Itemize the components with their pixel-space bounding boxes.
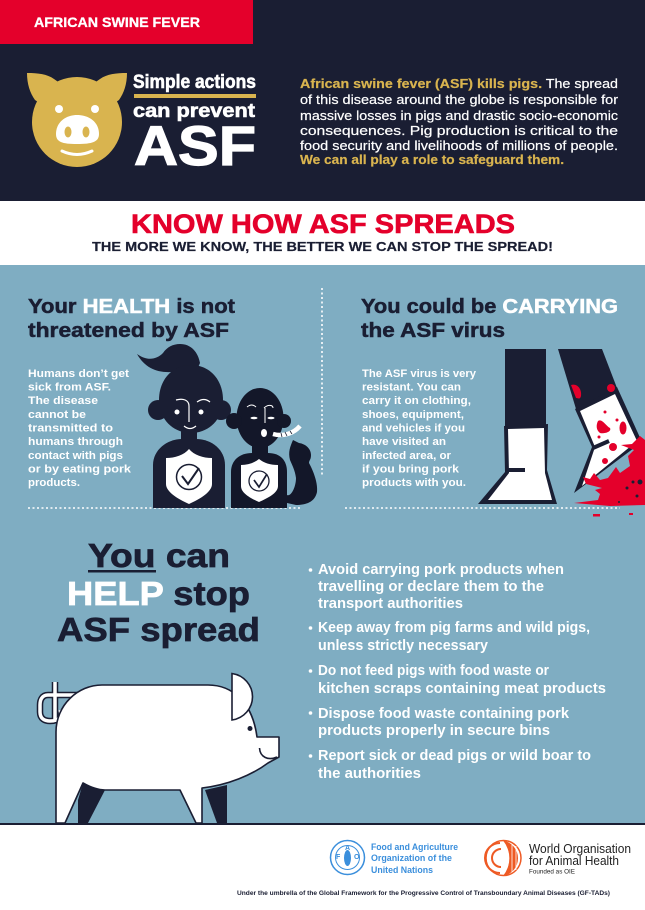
heading: know how ASF spreads: THE MORE WE KNOW, THE BETTER WE CAN STOP THE SPREAD!	[92, 239, 553, 254]
heading: you could be carrying	[361, 296, 618, 342]
text: humans: cannot be	[28, 409, 86, 421]
pig tail	[40, 682, 85, 722]
intro paragraph: massive losses in pigs and drastic socio-economic	[300, 109, 618, 123]
intro paragraph	[300, 77, 618, 167]
logo title: simple actions can prevent ASF	[133, 72, 256, 177]
heading: you could be carrying: the ASF virus	[361, 320, 505, 342]
illustration: white pig	[40, 674, 279, 823]
text: virus resistant: shoes, equipment,	[362, 409, 464, 421]
text: virus resistant: have visited an	[362, 436, 446, 448]
list: actions	[309, 562, 606, 782]
action 1	[309, 562, 564, 612]
text: humans: Humans don’t get	[28, 368, 129, 380]
red tag: African swine fever	[0, 0, 253, 44]
action 1: transport authorities	[318, 596, 463, 612]
pig body	[56, 685, 279, 823]
heading: you can help stop ASF spread: HELP stop	[67, 575, 250, 612]
FAO emblem: A	[345, 845, 350, 852]
pig back legs	[78, 783, 227, 823]
text: humans: or by eating pork	[28, 464, 132, 476]
heading: you can help stop ASF spread: You can	[88, 537, 230, 574]
WOAH emblem	[485, 840, 521, 876]
text: virus resistant: products with you.	[362, 477, 466, 489]
heading: know how ASF spreads	[92, 209, 553, 254]
FAO emblem: O	[354, 854, 360, 861]
text: virus resistant: infected area, or	[362, 450, 452, 462]
action 1: travelling or declare them to the	[318, 579, 544, 595]
logo: World Organisation for Animal Health	[485, 840, 631, 876]
text: virus resistant: and vehicles if you	[362, 422, 465, 434]
text: virus resistant: The ASF virus is very	[362, 368, 477, 380]
panel: header	[0, 0, 645, 201]
pig eye	[248, 726, 252, 731]
intro paragraph: food security and livelihoods of millions of people.	[300, 139, 618, 153]
action 4: products properly in secure bins	[318, 723, 550, 739]
intro paragraph: African swine fever (ASF) kills pigs. The spread	[300, 77, 618, 91]
WOAH name	[529, 842, 631, 876]
heading: your health is not threatened: Your HEALTH is not	[28, 296, 235, 318]
text: humans	[28, 368, 132, 489]
heading: know how ASF spreads: KNOW HOW ASF SPREADS	[131, 209, 515, 239]
text: humans: products.	[28, 477, 80, 489]
heading: your health is not threatened: threatened by ASF	[28, 320, 229, 342]
action 4: Dispose food waste containing pork	[318, 706, 570, 722]
text: virus resistant: if you bring pork	[362, 464, 460, 476]
heading: you could be carrying: You could be CARRYING	[361, 296, 618, 318]
text: humans: The disease	[28, 395, 98, 407]
logo title: simple actions can prevent ASF: Simple actions	[133, 72, 256, 93]
intro paragraph: consequences. Pig production is critical to the	[300, 124, 618, 138]
action 2: Keep away from pig farms and wild pigs,	[318, 620, 590, 636]
FAO emblem	[330, 840, 364, 874]
illustration: clean left leg and boot	[478, 349, 557, 504]
FAO name: Organization of the	[371, 853, 452, 864]
heading: your health is not threatened	[28, 296, 235, 342]
text: humans: transmitted to	[28, 422, 113, 434]
action 2	[309, 620, 590, 654]
action 3: Do not feed pigs with food waste or	[318, 663, 549, 679]
text: humans: humans through	[28, 436, 123, 448]
action 3	[309, 663, 606, 697]
pig ear	[232, 674, 253, 720]
FAO name	[371, 842, 458, 876]
panel: blue background	[0, 265, 645, 824]
action 1: Avoid carrying pork products when	[318, 562, 564, 578]
heading: you can help stop ASF spread: ASF spread	[57, 611, 260, 648]
illustration: contaminated right leg and boot	[558, 349, 645, 516]
text: virus resistant: resistant. You can	[362, 382, 461, 394]
WOAH name: Founded as OIE	[529, 868, 576, 876]
FAO emblem: F	[336, 854, 341, 861]
illustration: woman with shield	[137, 344, 231, 508]
red tag: African swine fever: AFRICAN SWINE FEVER	[34, 14, 200, 30]
logo: FAO	[330, 840, 458, 876]
action 5: Report sick or dead pigs or wild boar to	[318, 748, 591, 764]
text: virus resistant: carry it on clothing,	[362, 395, 471, 407]
action 3: kitchen scraps containing meat products	[318, 681, 606, 697]
text: humans: contact with pigs	[28, 450, 123, 462]
logo title: simple actions can prevent ASF: can prevent	[133, 101, 256, 122]
action 5	[309, 748, 591, 782]
logo title: simple actions can prevent ASF: ASF	[134, 114, 256, 177]
intro paragraph: We can all play a role to safeguard them.	[300, 153, 564, 167]
WOAH name: for Animal Health	[529, 854, 619, 868]
icon: pig face	[27, 73, 127, 167]
text: humans: sick from ASF.	[28, 382, 111, 394]
pig mouth	[260, 748, 277, 759]
action 2: unless strictly necessary	[318, 638, 488, 654]
action 4	[309, 706, 570, 739]
text: virus resistant	[362, 368, 477, 489]
WOAH name: World Organisation	[529, 842, 631, 856]
heading: you can help stop ASF spread	[57, 537, 260, 648]
FAO name: United Nations	[371, 865, 433, 876]
intro paragraph: of this disease around the globe is responsible for	[300, 93, 618, 107]
FAO name: Food and Agriculture	[371, 842, 458, 853]
action 5: the authorities	[318, 766, 421, 782]
illustration: boy eating sausage	[226, 388, 317, 508]
footer note: Under the umbrella of the Global Framework for the Progressive Control of Transboundary Animal Diseases (GF-TADs)	[237, 890, 610, 897]
